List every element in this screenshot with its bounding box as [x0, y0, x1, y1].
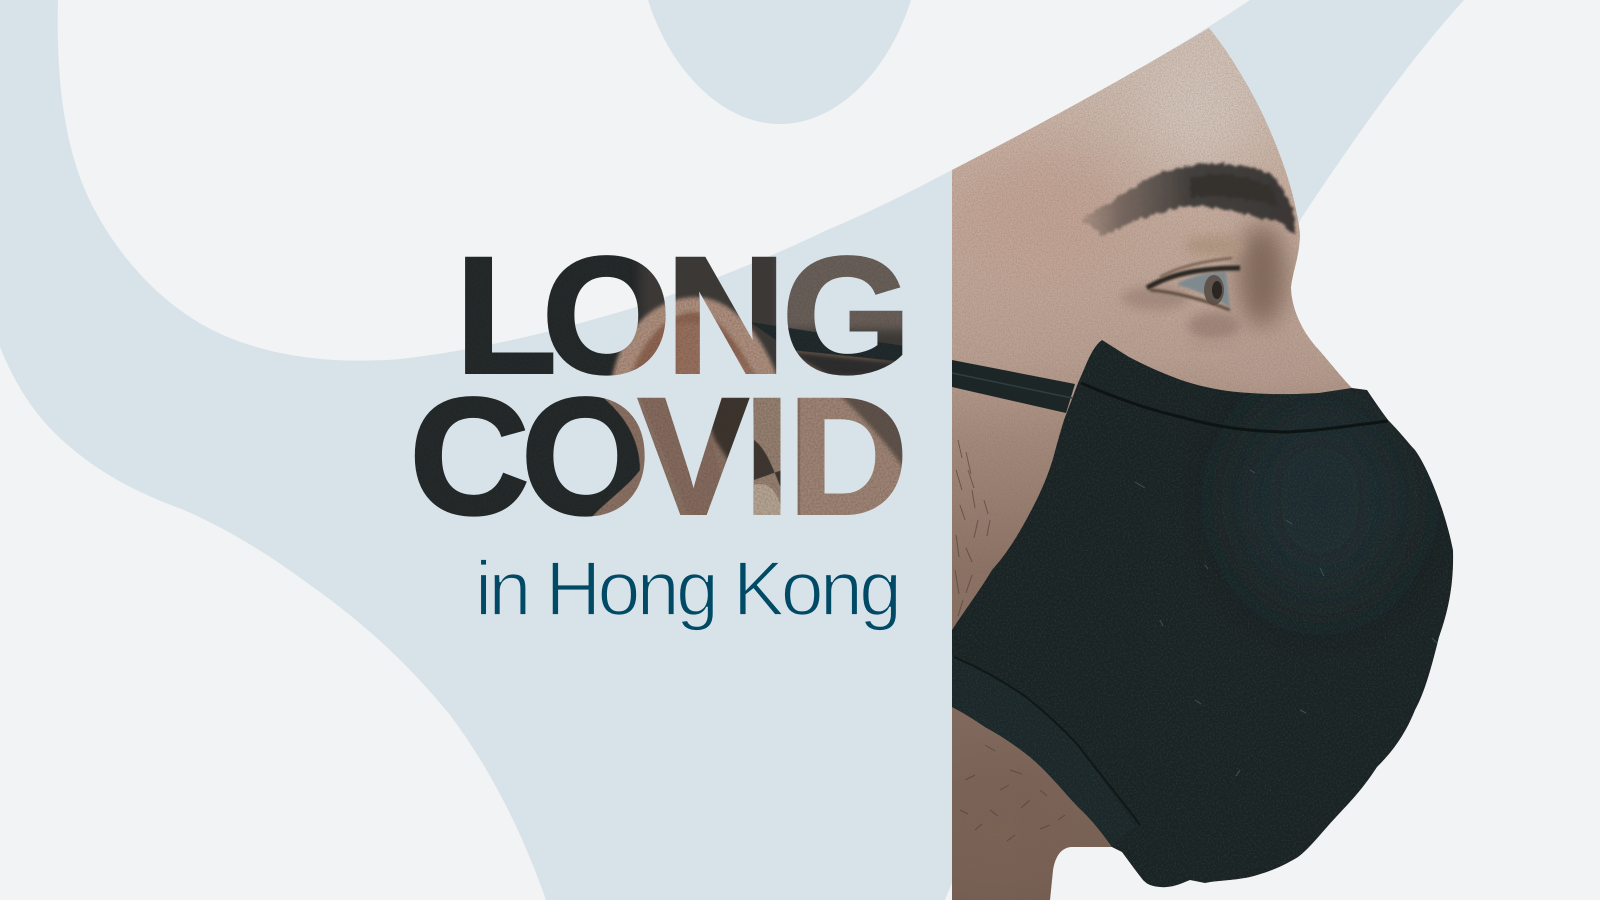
- subtitle: in Hong Kong: in Hong Kong: [475, 546, 902, 632]
- eyebrow: [1080, 163, 1297, 236]
- eye socket shading: [1238, 223, 1286, 327]
- title line: COVID: COVID: [410, 364, 908, 550]
- eye: [1147, 258, 1240, 310]
- title line: LONG: LONG: [456, 224, 911, 408]
- title: LONG COVID: [410, 224, 911, 550]
- face mask: [952, 330, 1472, 900]
- mask seams: [1081, 383, 1388, 432]
- background shape: light wedge at panel foot: [945, 883, 952, 900]
- skin grain: [952, 28, 1404, 590]
- background shape: top hanging oval: [648, 0, 911, 124]
- ear strap: [952, 360, 1075, 413]
- face skin: [952, 20, 1472, 900]
- photo: man in a black face mask, profile: [920, 20, 1472, 900]
- stubble: [955, 440, 1065, 841]
